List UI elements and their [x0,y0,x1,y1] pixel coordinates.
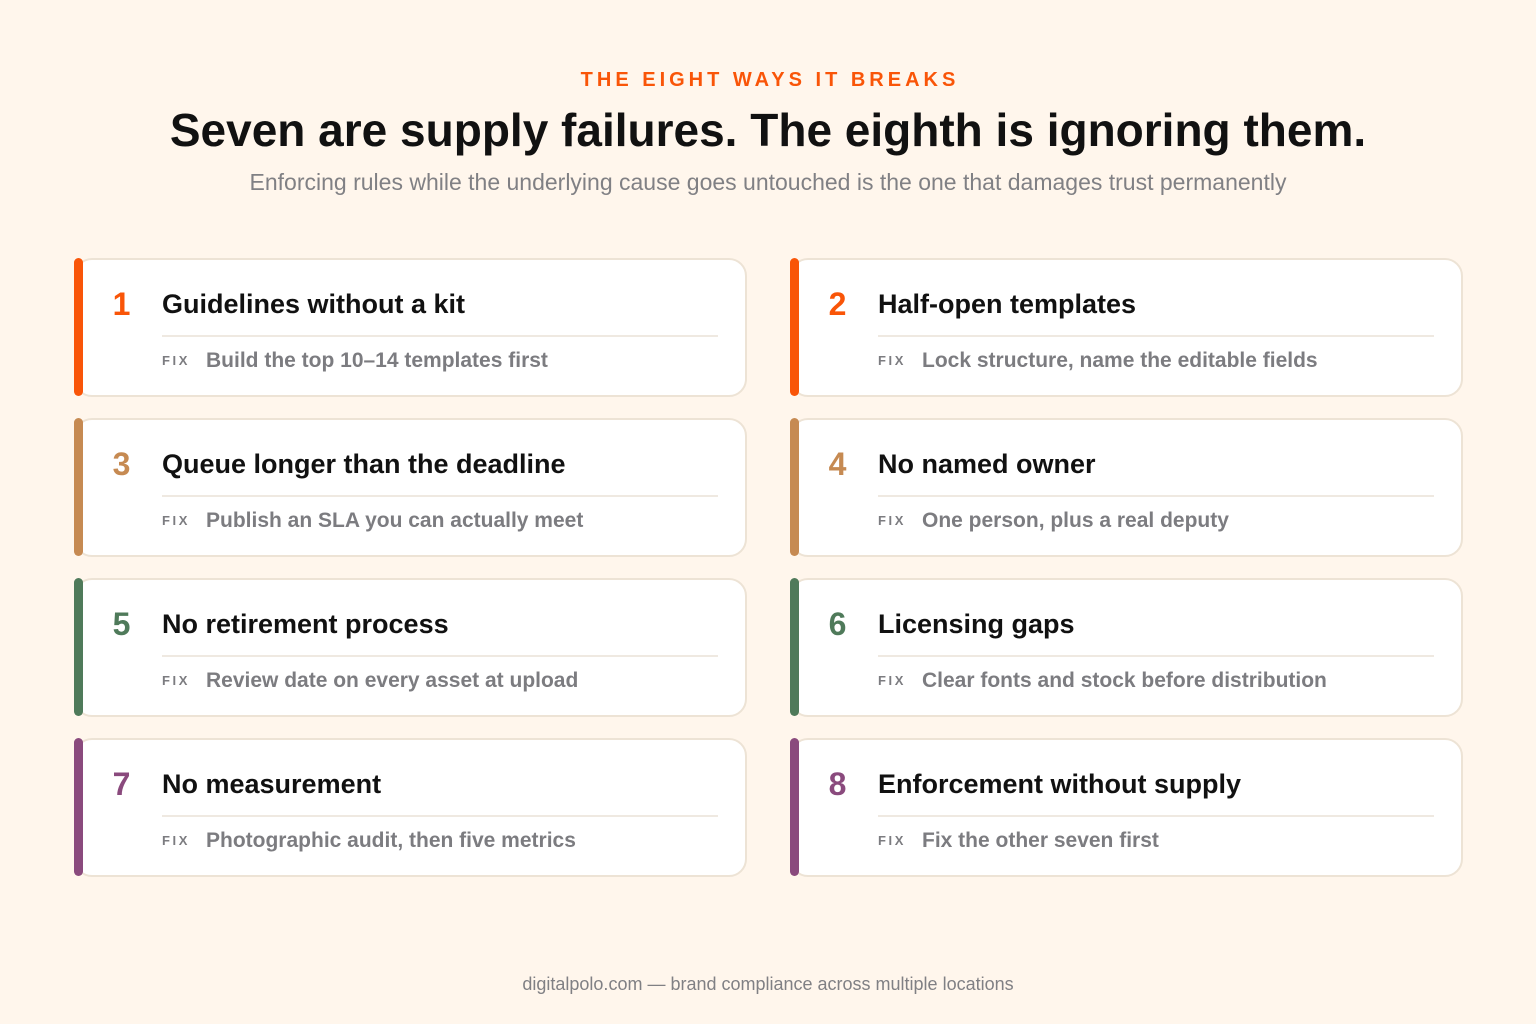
heading: card 7: No measurement [162,769,381,799]
fix text: card 1: Build the top 10–14 templates first [206,349,548,372]
panel: card 5 [74,578,747,717]
panel: card 2 [790,258,1463,397]
fix label: card 3: FIX [162,513,190,528]
number 6: 6 [829,606,846,642]
fix text: card 2: Lock structure, name the editable fields [922,349,1318,372]
fix text: card 5: Review date on every asset at upload [206,669,578,692]
panel: card 6 [790,578,1463,717]
fix label: card 7: FIX [162,833,190,848]
fix label: card 5: FIX [162,673,190,688]
number 2: 2 [829,286,846,322]
heading: card 2: Half-open templates [878,289,1136,319]
number 4: 4 [829,446,846,482]
fix text: card 3: Publish an SLA you can actually meet [206,509,583,532]
fix label: card 6: FIX [878,673,906,688]
number 1: 1 [113,286,130,322]
fix label: card 8: FIX [878,833,906,848]
fix label: card 1: FIX [162,353,190,368]
heading: card 6: Licensing gaps [878,609,1075,639]
heading: card 4: No named owner [878,449,1096,479]
fix text: card 4: One person, plus a real deputy [922,509,1229,532]
panel: card 3 [74,418,747,557]
fix label: card 4: FIX [878,513,906,528]
fix text: card 8: Fix the other seven first [922,829,1159,852]
panel: card 1 [74,258,747,397]
number 8: 8 [829,766,846,802]
heading: card 8: Enforcement without supply [878,769,1241,799]
panel: card 7 [74,738,747,877]
number 3: 3 [113,446,130,482]
heading: card 3: Queue longer than the deadline [162,449,566,479]
heading: card 5: No retirement process [162,609,449,639]
panel: card 4 [790,418,1463,557]
fix text: card 7: Photographic audit, then five metrics [206,829,576,852]
heading: card 1: Guidelines without a kit [162,289,465,319]
number 5: 5 [113,606,130,642]
eyebrow: THE EIGHT WAYS IT BREAKS [581,69,959,91]
fix text: card 6: Clear fonts and stock before distribution [922,669,1327,692]
number 7: 7 [113,766,130,802]
subtitle: Enforcing rules while the underlying cause goes untouched is the one that damages trust permanently [250,169,1286,195]
panel: card 8 [790,738,1463,877]
footer: digitalpolo.com — brand compliance across multiple locations [522,974,1014,994]
fix label: card 2: FIX [878,353,906,368]
title: Seven are supply failures. The eighth is ignoring them. [170,104,1366,156]
